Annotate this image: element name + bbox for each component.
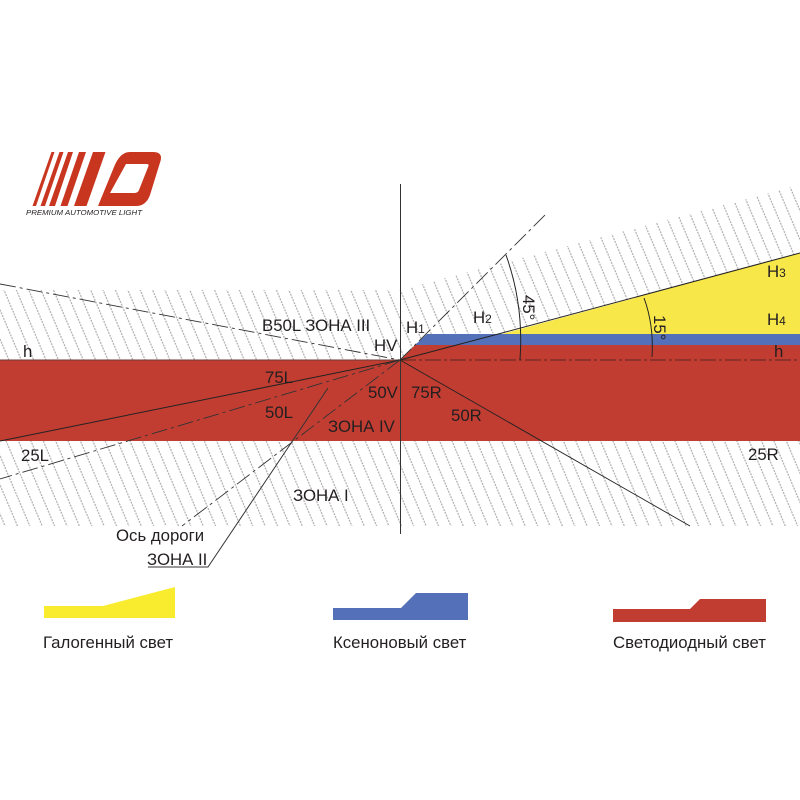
hatched zone: bottom (0, 441, 800, 526)
logo (26, 152, 161, 217)
label zone II: ЗОНА II (147, 550, 207, 569)
h line left (0, 359, 400, 361)
halogen swatch (44, 587, 175, 618)
label 75L: 75L (265, 368, 293, 387)
label H1: H1 (406, 318, 425, 337)
legend: halogen (43, 587, 175, 652)
label B50L zone III: В50L ЗОНА III (262, 316, 370, 335)
label H4: H4 (767, 310, 786, 329)
label 25L: 25L (21, 446, 49, 465)
LED swatch (613, 599, 766, 622)
B50L dash-dot line (0, 284, 400, 360)
red LED area (0, 345, 800, 441)
label HV: HV (374, 336, 398, 355)
logo tagline: PREMIUM AUTOMOTIVE LIGHT (26, 210, 143, 217)
LED label: Светодиодный свет (613, 633, 766, 652)
yellow halogen area (502, 253, 800, 334)
25L dash-dot line (0, 360, 400, 479)
zone II leader (148, 388, 328, 567)
logo letter O (98, 152, 161, 206)
label 45 degrees: 45° (519, 295, 538, 320)
hatched zone: upper left (0, 290, 400, 360)
label H3: H3 (767, 262, 786, 281)
hatched zone: upper right (400, 185, 800, 360)
label 15 degrees: 15° (650, 315, 669, 340)
label 50L: 50L (265, 403, 293, 422)
blue xenon area (415, 334, 800, 345)
label zone IV: ЗОНА IV (328, 417, 396, 436)
vertical axis (400, 184, 402, 534)
45 degree dash-dot line (400, 214, 546, 360)
xenon label: Ксеноновый свет (333, 633, 467, 652)
label 50R: 50R (451, 406, 482, 425)
label 25R: 25R (748, 445, 779, 464)
label h left: h (23, 342, 32, 361)
logo stripes (32, 152, 106, 206)
road axis dash-dot line (182, 360, 400, 526)
label road axis: Ось дороги (116, 526, 204, 545)
15 degree cut-off line (0, 253, 800, 441)
xenon swatch (333, 593, 468, 620)
legend: xenon (333, 593, 468, 652)
label 50V: 50V (368, 383, 399, 402)
arc 15 degrees (644, 298, 652, 357)
label 75R: 75R (411, 383, 442, 402)
arc 45 degrees (506, 255, 521, 360)
label H2: H2 (473, 308, 492, 327)
halogen label: Галогенный свет (43, 633, 173, 652)
label zone I: ЗОНА I (293, 486, 349, 505)
50R line (400, 360, 690, 526)
diagram labels (21, 262, 786, 569)
label h right: h (774, 342, 783, 361)
h dash-dot line right (400, 359, 800, 361)
legend: LED (613, 599, 766, 652)
